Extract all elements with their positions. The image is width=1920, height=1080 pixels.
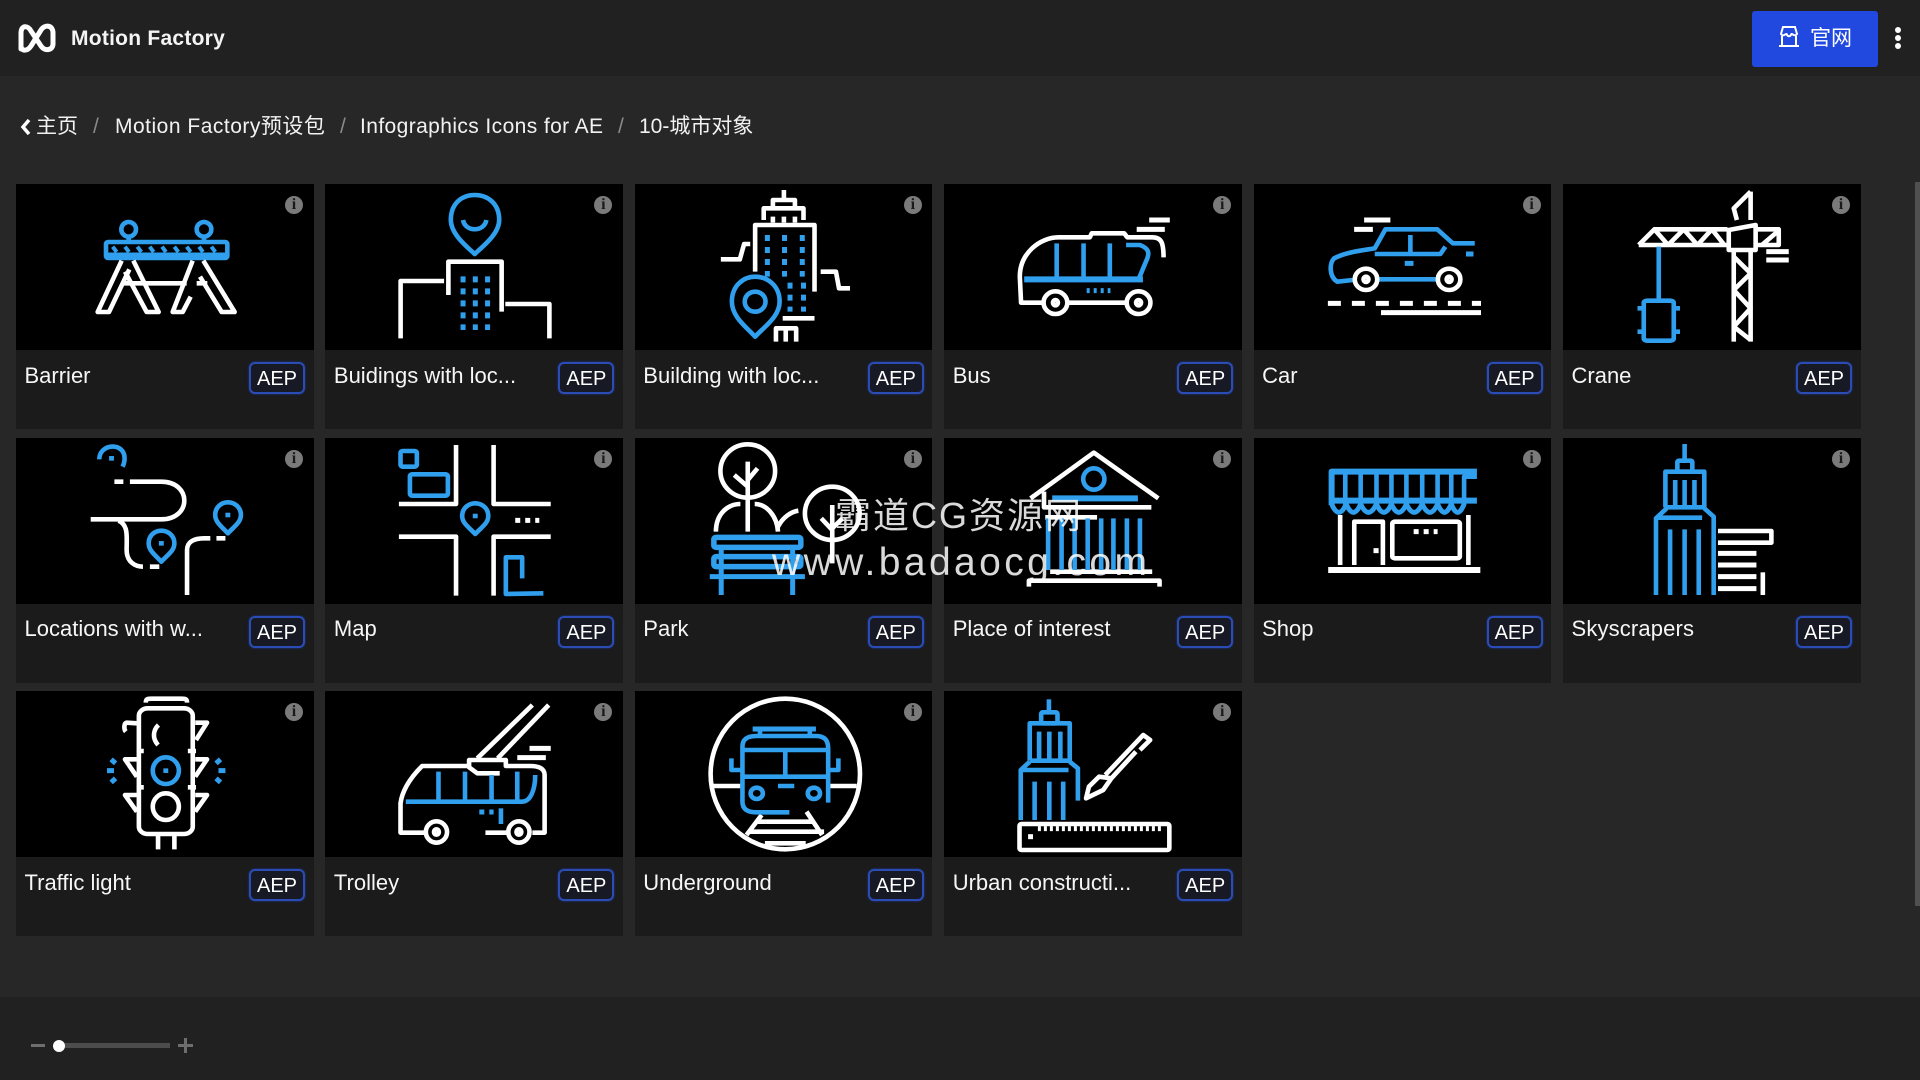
info icon [285,703,303,721]
info icon [594,703,612,721]
format badge [868,869,924,901]
separator: / [93,115,99,138]
info icon: i [1839,450,1843,466]
info icon [1832,450,1850,468]
icon: minus [31,1044,45,1047]
format badge: AEP [1185,622,1225,644]
info icon: i [601,450,606,466]
format badge [249,616,305,648]
format badge: AEP [257,622,297,644]
brand name: Motion Factory [71,27,225,50]
format badge [1177,362,1233,394]
info icon: i [1839,196,1843,213]
info icon [285,450,303,468]
top navigation bar [0,0,1920,76]
icon: route with pins [90,444,244,595]
info icon [1523,196,1541,214]
icon: park bench and trees [710,442,862,595]
card: Skyscrapers [1563,438,1860,682]
format badge: AEP [566,622,606,644]
format badge [249,869,305,901]
card: Place of interest [944,438,1242,682]
info icon [1832,196,1850,214]
button label: 官网 [1810,27,1852,50]
format badge [558,616,614,648]
format badge: AEP [257,875,297,897]
card title: Bus [953,363,991,388]
info icon [1213,450,1231,468]
icon: tower crane [1637,190,1789,343]
slider handle [53,1040,65,1052]
info icon [594,196,612,214]
info icon: i [292,450,296,466]
icon: skyscrapers [1654,444,1774,595]
icon: underground train [708,696,862,852]
watermark: site name: 霸道CG资源网 [835,495,1083,536]
icon: street map [398,445,551,596]
icon: traffic light [107,696,226,850]
card: Buildings with location [325,184,623,429]
card title: Traffic light [24,870,131,895]
slider track [55,1043,170,1048]
icon: barrier [95,220,237,314]
card: Car [1254,184,1551,429]
icon: store [1779,26,1799,47]
icon: trolleybus [398,703,551,845]
info icon [1213,703,1231,721]
card title: Urban constructi... [953,870,1131,895]
info icon: i [911,196,915,213]
info icon: i [601,196,606,213]
format badge [1796,616,1852,648]
card: Shop [1254,438,1551,682]
info icon: i [292,196,296,213]
format badge [1177,869,1233,901]
format badge [558,869,614,901]
format badge: AEP [566,368,606,390]
card: Park [635,438,932,682]
icon: Motion Factory logo [18,24,56,53]
icon: back chevron [20,118,30,136]
icon: tower with pin [720,190,850,342]
crumb: current: 10-城市对象 [639,115,753,138]
icon: urban construction [1017,699,1172,852]
icon: museum [1026,450,1162,587]
format badge [558,362,614,394]
format badge: AEP [1804,368,1844,390]
info icon: i [1220,703,1224,720]
card title: Place of interest [953,616,1110,640]
separator: / [340,115,346,138]
crumb: infographics: Infographics Icons for AE [360,115,603,138]
card title: Locations with w... [24,616,203,640]
watermark: URL: www.badaocg.com [772,541,1150,584]
card title: Map [334,616,377,640]
format badge [1487,362,1543,394]
info icon: i [1220,450,1224,466]
card title: Underground [643,870,772,895]
watermark [772,495,1150,584]
format badge: AEP [1495,368,1535,390]
info icon [285,196,303,214]
card title: Barrier [24,363,91,388]
crumb: home: 主页 [36,115,78,138]
format badge: AEP [1185,875,1225,897]
format badge: AEP [257,368,297,390]
zoom slider [31,1038,193,1053]
format badge [1177,616,1233,648]
card title: Trolley [334,870,399,895]
card: Barrier [16,184,314,429]
info icon: i [292,703,296,720]
card title: Building with loc... [643,363,819,388]
format badge [249,362,305,394]
info icon [904,196,922,214]
card: Map [325,438,623,682]
card: Trolley [325,691,623,936]
info icon: i [911,450,915,466]
button: official site [1752,11,1878,67]
format badge: AEP [1804,622,1844,644]
format badge: AEP [876,368,916,390]
info icon: i [911,703,915,720]
info icon [904,450,922,468]
card title: Buidings with loc... [334,363,516,388]
card: Bus [944,184,1242,429]
format badge: AEP [876,875,916,897]
info icon [1213,196,1231,214]
card title: Shop [1262,616,1313,640]
info icon: i [1529,196,1534,213]
card: Urban construction [944,691,1242,936]
card title: Skyscrapers [1572,616,1694,640]
card title: Car [1262,363,1298,388]
info icon [594,450,612,468]
info icon [1523,450,1541,468]
info icon: i [1220,196,1224,213]
bottom toolbar [0,997,1920,1080]
card: Underground [635,691,932,936]
icon: bus [1018,218,1170,316]
scrollbar [1915,182,1920,906]
format badge: AEP [876,622,916,644]
format badge [1487,616,1543,648]
separator: / [618,115,624,138]
icon: more menu [1895,27,1901,49]
format badge [1796,362,1852,394]
card: Traffic light [16,691,314,936]
icon: buildings with pin [398,192,552,338]
format badge: AEP [1495,622,1535,644]
info icon: i [601,703,606,720]
info icon [904,703,922,721]
format badge [868,362,924,394]
card: Building with location [635,184,932,429]
card title: Crane [1572,363,1631,388]
format badge [868,616,924,648]
format badge: AEP [1185,368,1225,390]
crumb: preset pack: Motion Factory预设包 [115,115,325,138]
breadcrumb navigation [20,115,753,138]
format badge: AEP [566,875,606,897]
icon: car [1328,218,1481,316]
card: Crane [1563,184,1860,429]
info icon: i [1529,450,1534,466]
icon: storefront [1328,468,1480,573]
card: Locations with way [16,438,314,682]
icon: plus [178,1038,193,1053]
card title: Park [643,616,689,640]
